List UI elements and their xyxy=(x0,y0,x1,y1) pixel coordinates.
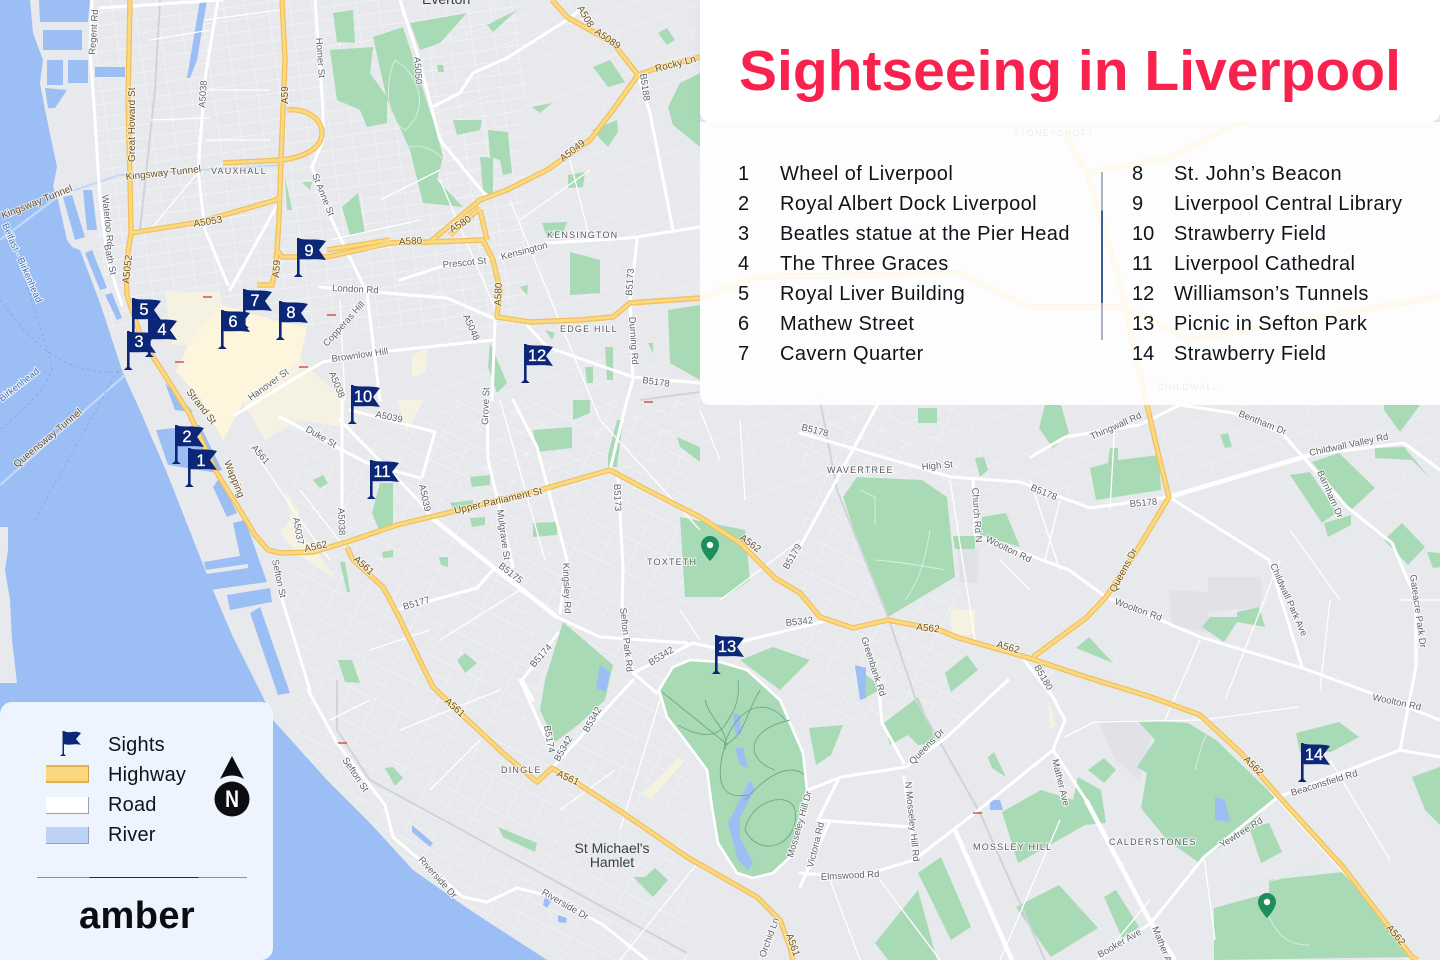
road labels: Kingsley Rd xyxy=(560,563,573,614)
label: St Michael's Hamlet: Hamlet xyxy=(590,854,634,870)
street map background: A562 xyxy=(1384,923,1407,948)
list panel: Cavern Quarter xyxy=(780,343,924,365)
parks xyxy=(285,10,1440,960)
legend: River: River xyxy=(108,824,156,846)
list panel: Wheel of Liverpool xyxy=(780,163,953,185)
legend divider xyxy=(37,877,247,878)
list panel: 13 xyxy=(1132,313,1154,335)
column divider xyxy=(1101,172,1102,340)
street map background: A580 xyxy=(448,214,474,236)
road labels: A5039 xyxy=(374,409,404,426)
district labels: CALDERSTONES xyxy=(1109,837,1197,847)
district labels: KENSINGTON xyxy=(547,230,618,240)
list panel: Mathew Street xyxy=(780,313,914,335)
street map background: A5089 xyxy=(592,26,623,52)
street map background: A508 xyxy=(574,4,596,30)
list panel: Beatles statue at the Pier Head xyxy=(780,223,1070,245)
flag 11 xyxy=(367,460,399,499)
street map background: Kingsway Tunnel xyxy=(0,183,74,222)
road labels: Bentham Dr xyxy=(1237,409,1288,438)
road labels: Riverside Dr xyxy=(540,887,590,923)
road labels: B5342 xyxy=(581,705,604,734)
district labels: WAVERTREE xyxy=(827,465,894,475)
road labels: B5342 xyxy=(552,734,575,764)
street map background: A5052 xyxy=(121,254,135,284)
road labels: Beaconsfield Rd xyxy=(1290,768,1359,799)
district labels: STONEYCROFT xyxy=(1013,128,1094,138)
swatch: road xyxy=(46,797,89,814)
district labels: EDGE HILL xyxy=(560,324,618,334)
road labels: B5173 xyxy=(611,484,623,512)
flag 9: 9 xyxy=(304,242,314,260)
district labels: DINGLE xyxy=(501,765,542,775)
list panel: Strawberry Field xyxy=(1174,223,1326,245)
flag 7: 7 xyxy=(250,292,260,310)
road labels: Orchid Ln xyxy=(757,917,782,959)
street map background: Strand St xyxy=(184,387,218,427)
road labels: Riverside Dr xyxy=(416,855,459,901)
amber logo: amber xyxy=(79,895,195,937)
list panel: Royal Liver Building xyxy=(780,283,965,305)
list panel: Liverpool Cathedral xyxy=(1174,253,1355,275)
flag 2 xyxy=(172,425,204,464)
flag 14: 14 xyxy=(1305,746,1323,764)
flag 6 xyxy=(218,310,250,349)
street map background: A59 xyxy=(280,86,291,104)
road labels: Yewtree Rd xyxy=(1218,815,1265,851)
list panel: 3 xyxy=(738,223,749,245)
flag 13 xyxy=(712,635,744,674)
legend panel xyxy=(0,702,273,960)
road labels: Brownlow Hill xyxy=(331,346,389,365)
road labels: Greenbank Rd xyxy=(858,636,888,698)
flag 4 xyxy=(145,318,177,357)
road labels: B5178 xyxy=(800,422,830,440)
list panel: Williamson’s Tunnels xyxy=(1174,283,1369,305)
list panel: 7 xyxy=(738,343,749,365)
street map background: A561 xyxy=(442,696,467,720)
road labels: Church Rd N xyxy=(969,487,984,543)
flag 1 xyxy=(185,448,217,487)
list panel: 11 xyxy=(1132,253,1153,275)
ferry routes xyxy=(0,230,120,520)
road labels: Barnham Dr xyxy=(1314,469,1345,520)
flag 8: 8 xyxy=(286,304,296,322)
road labels: B5178 xyxy=(1129,497,1158,510)
road labels: Elmswood Rd xyxy=(821,869,880,883)
park paths xyxy=(388,60,1320,945)
list panel: 14 xyxy=(1132,343,1154,365)
list panel: 12 xyxy=(1132,283,1154,305)
street map background: Queensway Tunnel xyxy=(12,407,85,470)
street map background: A580 xyxy=(493,282,505,306)
street map background: A580 xyxy=(399,236,423,248)
lakes xyxy=(596,665,1230,870)
road labels: A5050 xyxy=(411,56,424,85)
road labels: Mulgrave St xyxy=(494,509,512,561)
street grid waterfront east xyxy=(800,400,960,720)
road labels: B5342 xyxy=(785,615,814,629)
flag 12: 12 xyxy=(528,347,546,365)
road labels: London Rd xyxy=(332,283,379,296)
road labels: Copperas Hill xyxy=(321,299,367,349)
flag 1: 1 xyxy=(196,452,206,470)
road labels: St Anne St xyxy=(309,172,336,218)
road labels: Mosseley Hill Dr xyxy=(785,790,815,859)
legend flag icon xyxy=(60,731,81,756)
flag 13: 13 xyxy=(718,638,736,656)
title: Sightseeing in Liverpool xyxy=(739,39,1401,103)
road labels: Durning Rd xyxy=(626,316,640,365)
flag 2: 2 xyxy=(182,428,192,446)
legend: Highway: Highway xyxy=(108,764,186,786)
road labels: B5342 xyxy=(647,645,676,669)
road labels: A5048 xyxy=(460,313,481,342)
swatch: highway xyxy=(46,765,89,783)
north arrow xyxy=(214,756,250,816)
road labels: Woolton Rd xyxy=(984,534,1033,565)
flag 4: 4 xyxy=(157,321,167,339)
street map background: A562 xyxy=(995,639,1021,656)
city centre area xyxy=(176,305,307,440)
road labels: B5173 xyxy=(624,268,637,296)
road labels: Homer St xyxy=(313,37,327,79)
road labels: Kensington xyxy=(500,240,549,263)
list panel: 2 xyxy=(738,193,749,215)
right list column xyxy=(1132,163,1402,365)
list panel: 8 xyxy=(1132,163,1143,185)
road labels: Waterloo Rd xyxy=(99,194,115,247)
river and docks xyxy=(0,0,567,960)
list panel: 9 xyxy=(1132,193,1143,215)
road labels: B5178 xyxy=(1029,483,1058,503)
flag 5 xyxy=(129,298,161,337)
street map background: A561 xyxy=(783,932,802,958)
road labels: B5188 xyxy=(637,73,652,102)
list panel: Picnic in Sefton Park xyxy=(1174,313,1367,335)
road labels: Bath St xyxy=(101,243,118,276)
road labels: Booker Ave xyxy=(1096,927,1143,960)
legend: Road: Road xyxy=(108,794,157,816)
list panel: Strawberry Field xyxy=(1174,343,1326,365)
list panel: Royal Albert Dock Liverpool xyxy=(780,193,1037,215)
road labels: Prescot St xyxy=(442,255,487,271)
list panel: Liverpool Central Library xyxy=(1174,193,1402,215)
road labels: B5178 xyxy=(642,375,670,390)
street grid suburbs east xyxy=(960,500,1440,960)
north arrow: N xyxy=(225,785,239,813)
road labels: B5174 xyxy=(528,642,555,670)
road labels: N Mosseley Hill Rd xyxy=(902,781,921,862)
road labels: B5177 xyxy=(402,595,431,613)
road labels: Grove St xyxy=(480,387,492,425)
flag 10 xyxy=(348,385,380,424)
road labels: A5038 xyxy=(326,370,347,400)
street grid suburbs south xyxy=(800,720,960,960)
street grid south xyxy=(290,400,690,960)
pale student districts xyxy=(165,292,1056,800)
road labels: A5037 xyxy=(290,517,306,546)
street grid centre east xyxy=(430,0,1440,500)
road labels: Woolton Rd xyxy=(1113,596,1163,624)
label: St Michael's Hamlet: St Michael's xyxy=(574,840,650,856)
street map background: Upper Parliament St xyxy=(453,486,544,517)
list panel: 1 xyxy=(738,163,749,185)
dock land strips and west bank xyxy=(0,395,248,683)
road labels: Childwall Valley Rd xyxy=(1308,431,1389,459)
flag 3: 3 xyxy=(134,333,144,351)
street map background: Rocky Ln xyxy=(654,54,697,75)
railway station marks xyxy=(175,297,982,813)
street map background: A562 xyxy=(916,622,940,635)
road labels: Duke St xyxy=(304,424,339,451)
road labels: A5039 xyxy=(416,483,433,513)
list panel: 10 xyxy=(1132,223,1154,245)
legend: Sights: Sights xyxy=(108,734,165,756)
district labels: TOXTETH xyxy=(647,557,697,567)
street grid north xyxy=(95,0,525,330)
flag 8 xyxy=(276,301,308,340)
road labels: B5175 xyxy=(496,561,525,586)
road labels: Hanover St xyxy=(246,366,292,403)
street map background: A5049 xyxy=(558,138,588,164)
road labels: Sefton St xyxy=(269,558,288,599)
flag 11: 11 xyxy=(373,463,391,481)
district labels: VAUXHALL xyxy=(211,166,267,176)
road labels: A5038 xyxy=(335,508,347,536)
flag 3 xyxy=(124,331,156,370)
street map background: Kingsway Tunnel xyxy=(125,164,202,183)
list panel: St. John’s Beacon xyxy=(1174,163,1342,185)
flag 10: 10 xyxy=(354,388,372,406)
road labels: Sefton St xyxy=(340,756,371,794)
street map background: A562 xyxy=(303,539,329,555)
road labels: Childwall Park Ave xyxy=(1267,562,1309,638)
street map background: A561 xyxy=(351,554,376,578)
road labels: Woolton Rd xyxy=(1371,692,1422,713)
wide white roads xyxy=(432,455,1310,960)
road labels: B5180 xyxy=(1031,663,1055,692)
road labels: Queens Dr xyxy=(907,726,947,767)
list panel: 5 xyxy=(738,283,749,305)
grey superblocks xyxy=(958,549,1261,780)
street map background: A562 xyxy=(737,533,763,555)
left list column xyxy=(738,163,1070,365)
road labels: B5174 xyxy=(541,725,557,754)
street map background: A562 xyxy=(1241,754,1266,779)
flag 14 xyxy=(1298,743,1330,782)
street map background: A561 xyxy=(555,769,581,788)
flag 9 xyxy=(294,238,326,277)
tunnel lines on river xyxy=(0,165,280,485)
road labels: Victoria Rd xyxy=(805,821,827,869)
list panel xyxy=(700,122,1440,405)
street map background: Great Howard St xyxy=(127,87,138,162)
rail lines xyxy=(140,0,1045,960)
road labels: Belfast - Birkenhead xyxy=(0,222,44,304)
flag 5: 5 xyxy=(139,301,149,319)
road labels: Regent Rd xyxy=(87,9,101,55)
road labels: Thingwall Rd xyxy=(1089,410,1143,443)
road labels: High St xyxy=(921,459,954,473)
road labels: A561 xyxy=(249,443,271,467)
street map background: Queens Dr xyxy=(1108,546,1141,594)
list panel: The Three Graces xyxy=(780,253,949,275)
road labels: Mather Ave xyxy=(1049,758,1071,807)
road labels: Sefton Park Rd xyxy=(617,607,635,672)
road labels: Gateacre Park Dr xyxy=(1407,574,1428,649)
list panel: 4 xyxy=(738,253,749,275)
road labels: B5179 xyxy=(781,542,804,572)
flag 12 xyxy=(521,344,553,383)
street map background: A59 xyxy=(271,259,283,278)
district labels: MOSSLEY HILL xyxy=(973,842,1052,852)
street map background: Wapping xyxy=(221,459,246,499)
district labels: CHILDWALL xyxy=(1157,382,1219,392)
flag 7 xyxy=(240,289,272,328)
flag 6: 6 xyxy=(228,313,238,331)
road labels: A5038 xyxy=(197,80,210,108)
district labels xyxy=(211,128,1219,852)
swatch: river xyxy=(46,827,89,844)
list panel: 6 xyxy=(738,313,749,335)
Sefton Park outline and paths xyxy=(659,660,807,878)
title panel xyxy=(700,0,1440,122)
street map background: A5053 xyxy=(193,215,223,230)
park markers xyxy=(701,536,1276,918)
